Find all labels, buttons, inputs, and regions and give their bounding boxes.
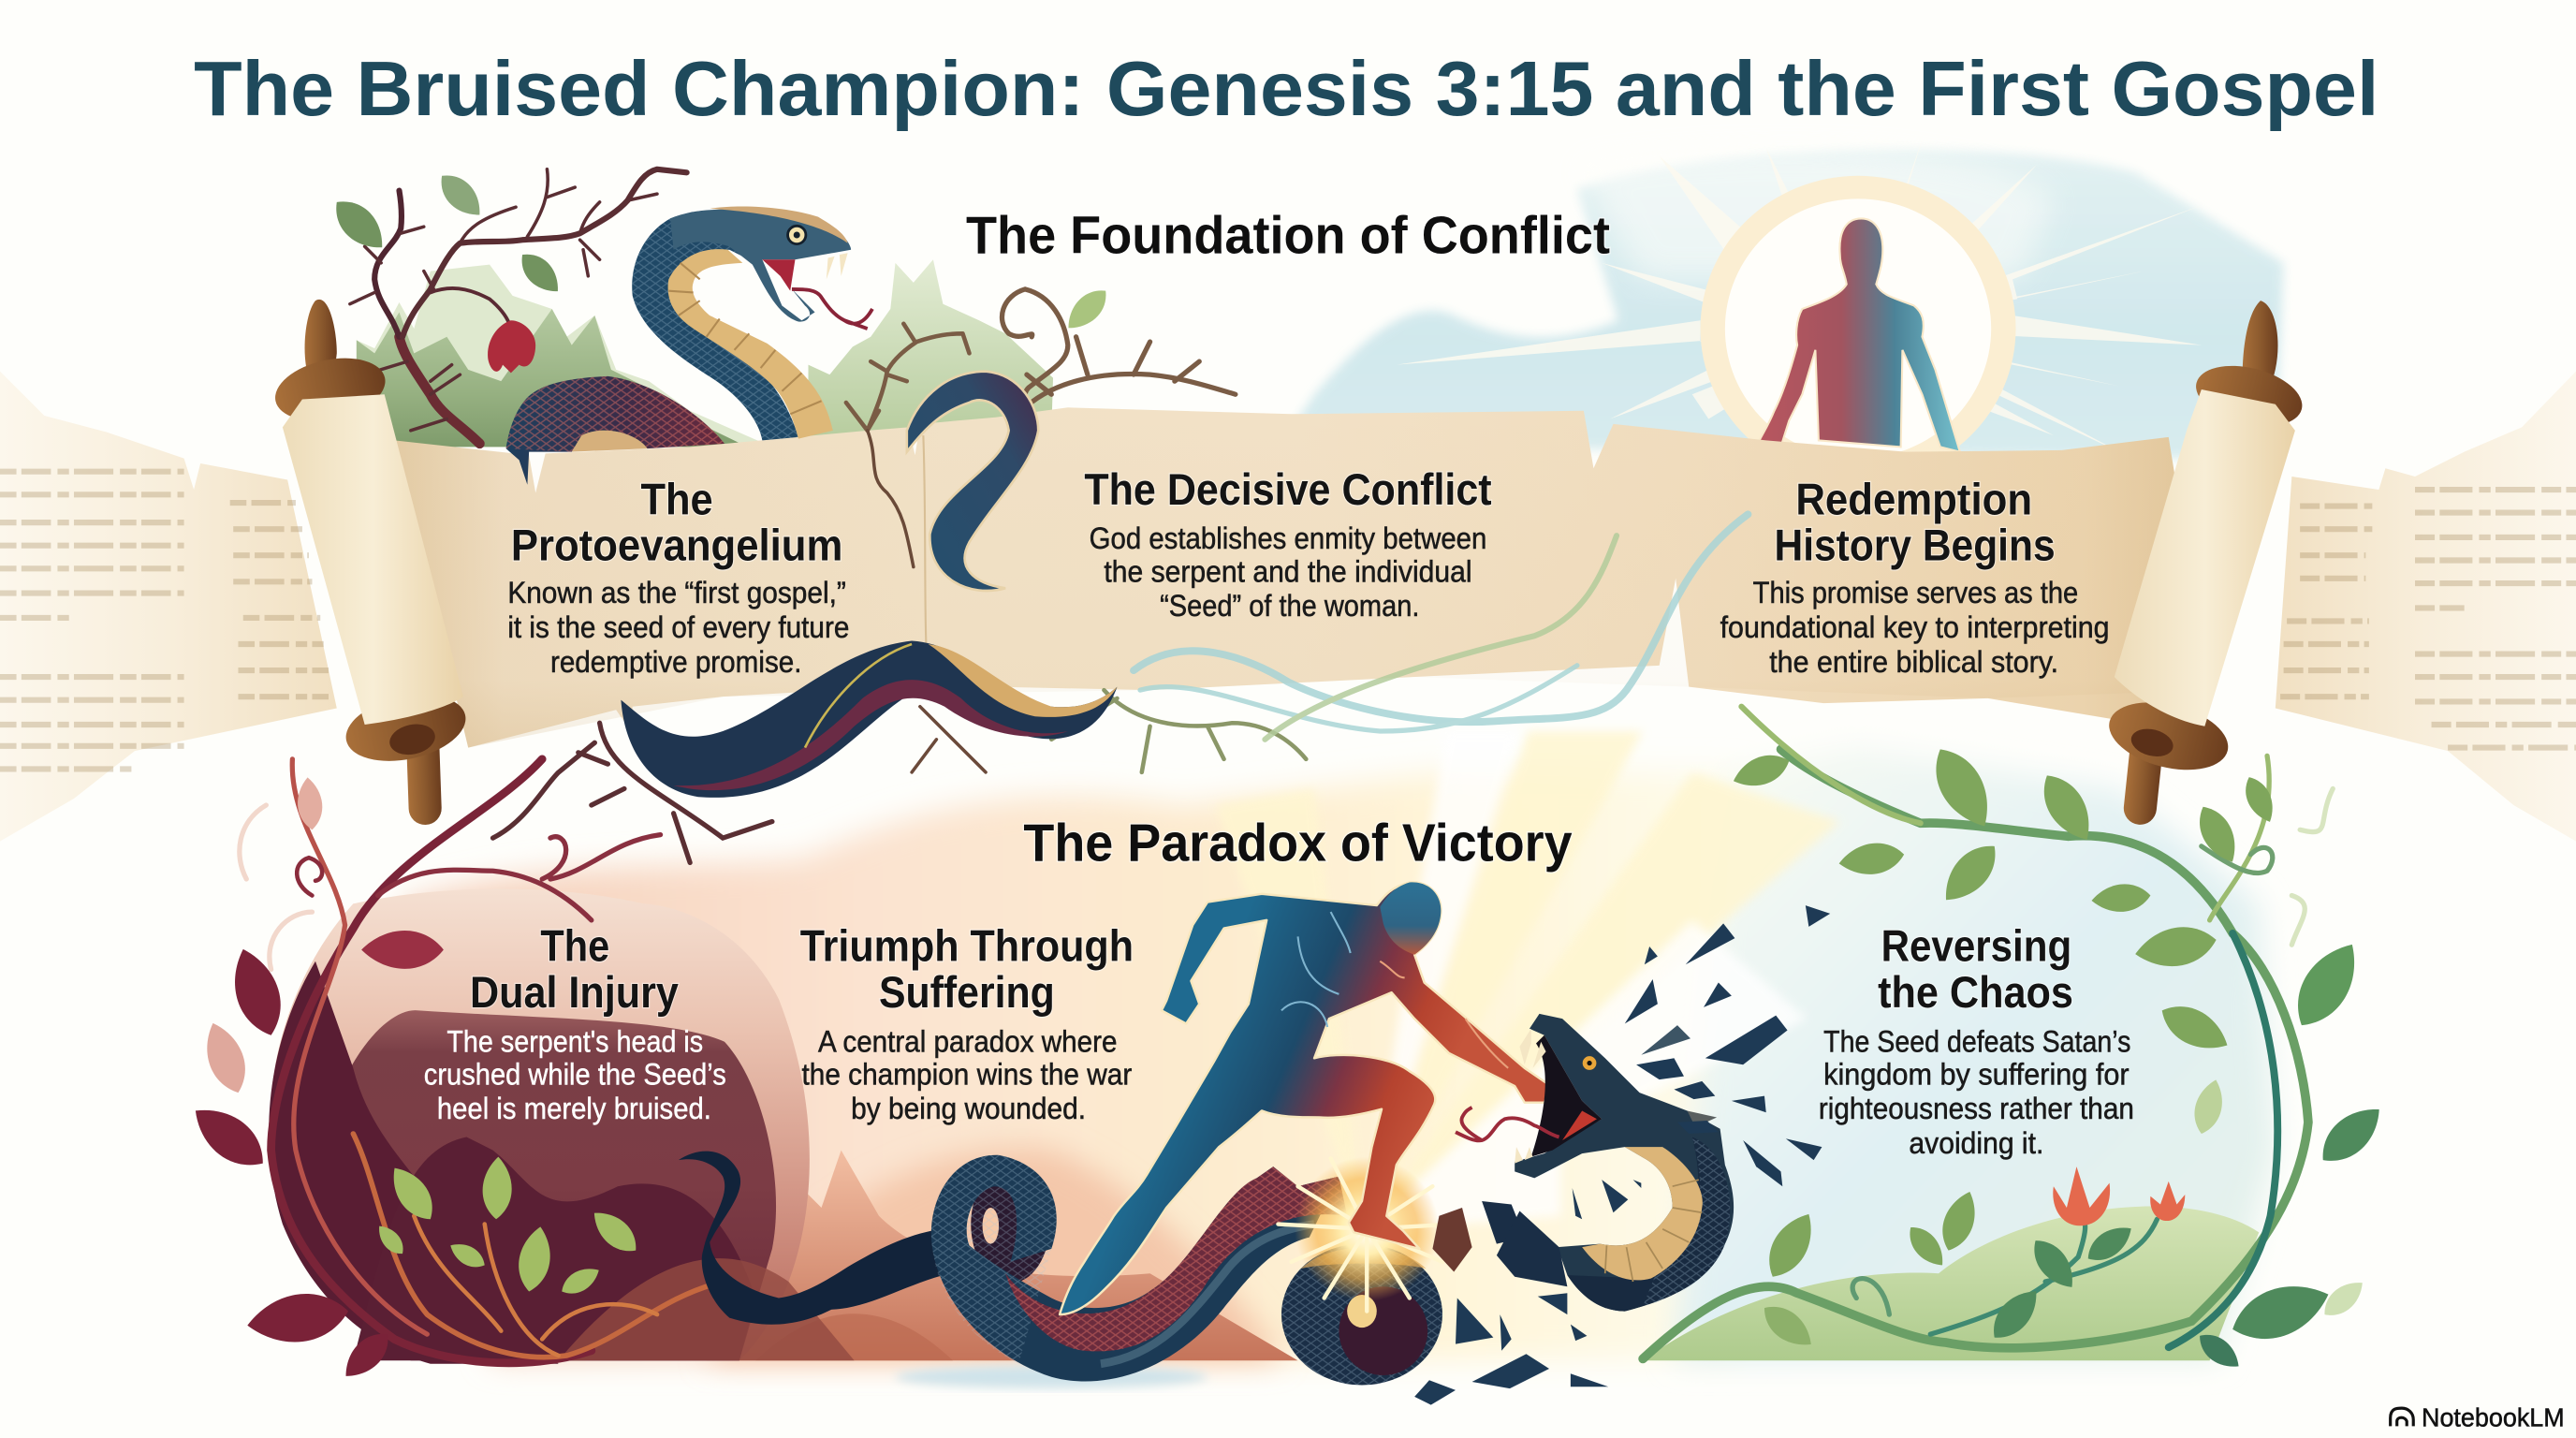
icons: shattered shards: [1414, 905, 1830, 1405]
text block: The Dual Injury: The serpent's head is: [446, 1024, 703, 1058]
text block: The Decisive Conflict: God establishes enmity between: [1090, 521, 1486, 555]
text block: The Dual Injury: [424, 922, 726, 1125]
icon: lower serpent tail: [679, 1152, 949, 1325]
text block: The Dual Injury: heel is merely bruised.: [437, 1092, 711, 1125]
text block: The Decisive Conflict: The Decisive Conflict: [1084, 465, 1492, 515]
text block: The Protoevangelium: The: [640, 475, 713, 524]
logo: NotebookLM: NotebookLM: [2422, 1402, 2565, 1431]
panel: scroll left roller: [270, 300, 472, 826]
text block: Reversing the Chaos: righteousness rather than: [1819, 1092, 2134, 1125]
scene: garden bush behind serpent: [357, 259, 1053, 447]
icon: lower serpent coil: [931, 1155, 1347, 1382]
text block: Triumph Through Suffering: A central paradox where: [818, 1024, 1117, 1058]
text block: Redemption History Begins: Redemption: [1795, 475, 2032, 524]
title: The Bruised Champion: Genesis 3:15 and the First Gospel: [194, 46, 2378, 132]
icons: green sprouts: [373, 1156, 645, 1300]
text block: Redemption History Begins: History Begins: [1775, 521, 2056, 570]
panel: right torn parchment: [2276, 372, 2576, 842]
icon: glowing man silhouette: [1756, 218, 1960, 470]
text block: Triumph Through Suffering: Suffering: [879, 968, 1055, 1018]
icon: upper serpent neck and head: [632, 206, 872, 440]
icon: champion figure: [1060, 882, 1551, 1314]
heading: The Foundation of Conflict: The Foundation of Conflict: [966, 205, 1610, 264]
text block: Reversing the Chaos: avoiding it.: [1909, 1126, 2043, 1160]
panel: left torn parchment: [0, 372, 337, 842]
text block: Redemption History Begins: the entire biblical story.: [1769, 645, 2058, 679]
icon: right green vine: [1643, 707, 2333, 1358]
icon: lower roots: [493, 690, 1306, 862]
text block: Reversing the Chaos: The Seed defeats Satan’s: [1823, 1024, 2130, 1058]
scene: lower background panel: [402, 731, 2276, 1360]
text block: The Dual Injury: Dual Injury: [470, 968, 679, 1018]
icon: red fruit: [488, 320, 535, 373]
icon: impact burst: [1278, 1157, 1454, 1312]
text block: The Decisive Conflict: [1084, 465, 1492, 623]
text block: Reversing the Chaos: the Chaos: [1878, 968, 2073, 1018]
icon: left maroon vine: [240, 759, 723, 1363]
text block: The Protoevangelium: it is the seed of every future: [507, 610, 849, 644]
text block: The Protoevangelium: Known as the “first gospel,”: [507, 576, 846, 609]
text block: Reversing the Chaos: [1819, 922, 2134, 1160]
scene: sun halo and blue hills: [1281, 139, 2284, 481]
icon: crushed serpent head and neck: [1432, 1014, 1734, 1312]
text block: The Decisive Conflict: “Seed” of the woman.: [1160, 589, 1419, 623]
heading: The Paradox of Victory: The Paradox of Victory: [1023, 814, 1573, 873]
text block: Redemption History Begins: [1720, 475, 2110, 679]
scene: terracotta hills: [707, 1149, 1298, 1360]
text block: The Dual Injury: crushed while the Seed’s: [424, 1057, 726, 1091]
icon: ground shadow: [896, 1365, 1208, 1388]
icons: maroon leaves: [183, 776, 444, 1386]
text block: Triumph Through Suffering: Triumph Through: [800, 922, 1134, 972]
text block: Triumph Through Suffering: the champion wins the war: [801, 1057, 1132, 1091]
text block: Reversing the Chaos: Reversing: [1881, 922, 2071, 972]
text block: Triumph Through Suffering: by being wounded.: [851, 1092, 1086, 1125]
text block: Redemption History Begins: This promise serves as the: [1753, 576, 2078, 609]
panel: central scroll parchment: [394, 407, 2210, 748]
icon: teal and green wisps: [1134, 514, 1748, 740]
icon: lower serpent through scroll: [621, 640, 1117, 798]
text block: The Protoevangelium: Protoevangelium: [511, 521, 842, 570]
text block: The Decisive Conflict: the serpent and the individual: [1104, 554, 1472, 588]
scene: rose and maroon landscape: [269, 889, 855, 1364]
text block: The Protoevangelium: redemptive promise.: [550, 645, 801, 679]
icons: leaves around the tree: [326, 167, 1114, 337]
text block: The Protoevangelium: [507, 475, 849, 679]
text block: The Dual Injury: The: [540, 922, 609, 972]
icons: red tulips: [2053, 1167, 2185, 1225]
text block: Triumph Through Suffering: [800, 922, 1134, 1125]
panel: scroll right roller: [2102, 301, 2308, 827]
icon: upper serpent hump: [506, 376, 724, 485]
icons: green vine leaves: [1729, 739, 2391, 1375]
icon: coil under foot: [1281, 1244, 1442, 1386]
text block: Redemption History Begins: foundational key to interpreting: [1720, 610, 2110, 644]
scene: thorn branches and fruit: [350, 169, 1236, 567]
text block: Reversing the Chaos: kingdom by suffering for: [1823, 1057, 2130, 1091]
icon: serpent tail across scroll: [907, 372, 1038, 591]
